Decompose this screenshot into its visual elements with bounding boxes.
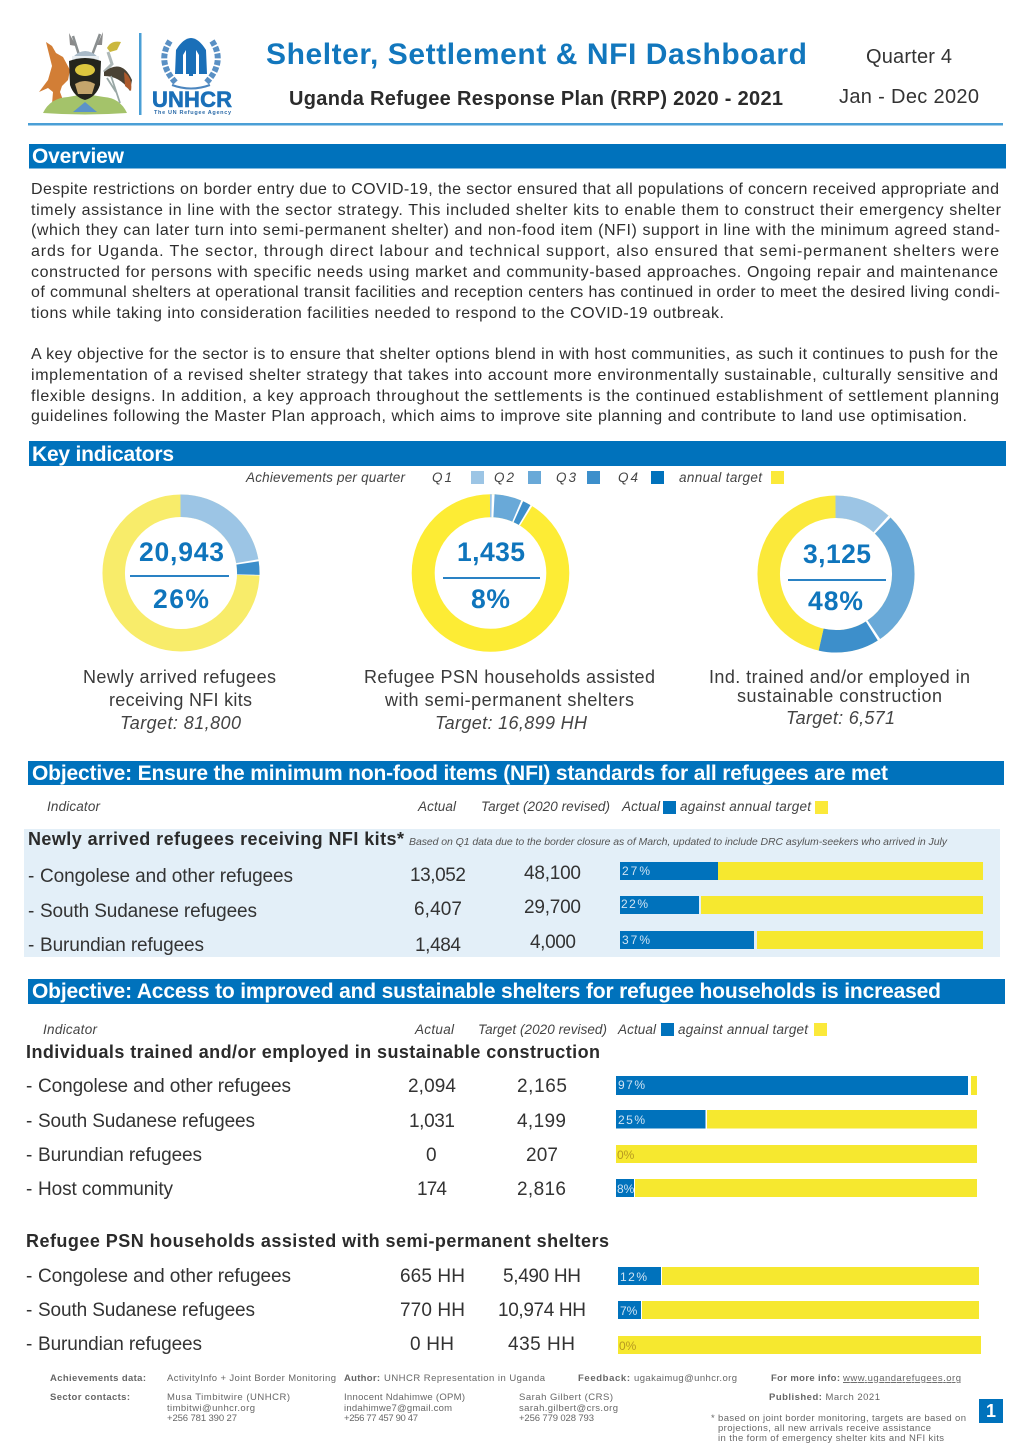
row: Congolese xyxy=(26,1266,979,1287)
legend: achievements per quarter: Q3 xyxy=(556,470,576,485)
row: South Sudanese: 6,407 xyxy=(414,899,462,920)
table header: Indicator xyxy=(47,799,100,814)
row: Burundian: - xyxy=(28,935,34,956)
footnote: * based on joint border monitoring, targets are based on xyxy=(711,1413,966,1424)
donut: individuals trained: sustainable construction xyxy=(737,686,942,706)
row: South Sudanese: 7% xyxy=(620,1304,638,1318)
row: Burundian: Burundian refugees xyxy=(40,935,204,956)
row: Burundian: 4,000 xyxy=(530,932,576,953)
credits row: ActivityInfo + Joint Border Monitoring xyxy=(167,1373,336,1384)
row: South Sudanese: 22% xyxy=(621,897,648,911)
header xyxy=(28,32,1003,126)
table header: Actual xyxy=(414,1022,455,1037)
row: Burundian xyxy=(26,1145,977,1166)
heading: objective 2: Objective: Access to improved and sustainable shelters for refugee households is increased xyxy=(32,980,941,1003)
quarter: Quarter 4 xyxy=(866,46,952,68)
panel: objective NFI standards xyxy=(24,761,1004,957)
table header xyxy=(47,799,828,814)
heading: key indicators xyxy=(29,441,1006,466)
text block: overview paragraph 2: implementation of a revised shelter strategy that takes into account more environmentally sustainable, culturally sensitive and xyxy=(31,367,998,384)
donut: newly arrived refugees: 20,943 xyxy=(139,537,224,567)
table header: Target (2020 revised) xyxy=(478,1022,607,1037)
footnote xyxy=(711,1413,966,1444)
text block: overview paragraph 2 xyxy=(31,346,999,425)
row: Congolese: Congolese and other refugees xyxy=(40,866,293,887)
text block: overview paragraph 1: of communal shelters at operational transit facilities and reception centers has continued in order to meet the desired living condi- xyxy=(31,284,1000,301)
donut: individuals trained: Ind. trained and/or employed in xyxy=(709,667,970,687)
subheading: PSN households: Refugee PSN households assisted with semi-permanent shelters xyxy=(26,1231,609,1251)
text block: overview paragraph 2: flexible designs. In addition, a key approach throughout the settlements is the continued establishment of settlement planning xyxy=(31,388,999,405)
text block: overview paragraph 2: A key objective for the sector is to ensure that shelter options blend in with host communities, as such it continues to push for the xyxy=(31,346,998,363)
legend: achievements per quarter xyxy=(245,470,784,485)
row: South Sudanese: - xyxy=(26,1111,32,1132)
row: Burundian: 435 HH xyxy=(508,1334,575,1355)
row: Congolese: 2,094 xyxy=(408,1076,456,1097)
panel: overview xyxy=(29,144,1006,425)
donut: individuals trained: 3,125 xyxy=(803,539,871,569)
row: South Sudanese xyxy=(28,896,983,922)
donut: refugee PSN households: 1,435 xyxy=(457,537,525,567)
sector contacts: +256 77 457 90 47 xyxy=(344,1413,418,1424)
icon: Uganda coat of arms xyxy=(39,32,132,114)
row: Congolese: Congolese and other refugees xyxy=(38,1076,291,1097)
text block: overview paragraph 1: (which they can later turn into semi-permanent shelter) and non-food item (NFI) support in line with the minimum agreed stand- xyxy=(31,222,1000,239)
donut: newly arrived refugees: Newly arrived refugees xyxy=(83,667,276,687)
row: Burundian: Burundian refugees xyxy=(38,1145,202,1166)
row: South Sudanese: South Sudanese refugees xyxy=(38,1111,255,1132)
text block: overview paragraph 2: guidelines following the Master Plan approach, which aims to improve site planning and contribute to land use optimisation. xyxy=(31,408,967,425)
row: Host community: 8% xyxy=(617,1182,635,1196)
published: Published: March 2021 xyxy=(769,1392,880,1403)
credits row xyxy=(50,1373,961,1384)
row: Congolese: 5,490 HH xyxy=(503,1266,581,1287)
row: South Sudanese: South Sudanese refugees xyxy=(40,901,257,922)
text block: overview paragraph 1 xyxy=(31,181,1002,322)
sector contacts: sarah.gilbert@crs.org xyxy=(519,1403,618,1414)
donut: refugee PSN households xyxy=(364,506,655,733)
donut: refugee PSN households: Target: 16,899 HH xyxy=(435,713,588,733)
sector contacts: +256 779 028 793 xyxy=(519,1413,594,1424)
footer xyxy=(50,1373,1003,1444)
text block: overview paragraph 1: Despite restrictions on border entry due to COVID-19, the sector ensured that all populations of concern received appropriate and xyxy=(31,181,999,198)
text block: overview paragraph 1: ards for Uganda. The sector, through direct labour and technical support, also ensured that semi-permanent shelters were xyxy=(31,243,999,260)
row: Host community: Host community xyxy=(38,1179,174,1200)
row: Burundian: 37% xyxy=(622,933,650,947)
row: Congolese: 2,165 xyxy=(517,1076,567,1097)
table header: Actual xyxy=(617,1022,657,1037)
row: South Sudanese: 25% xyxy=(618,1113,645,1127)
heading: overview xyxy=(29,144,1006,168)
credits row: ugakaimug@unhcr.org xyxy=(634,1373,737,1384)
row: Congolese xyxy=(28,862,983,887)
heading: objective 1: Objective: Ensure the minimum non-food items (NFI) standards for all refugees are met xyxy=(32,762,888,785)
row: Congolese: - xyxy=(26,1266,32,1287)
legend: achievements per quarter: Q1 xyxy=(432,470,452,485)
row: Congolese: 97% xyxy=(618,1078,645,1092)
donut: refugee PSN households: with semi-permanent shelters xyxy=(384,690,634,710)
table header: Actual xyxy=(621,799,661,814)
row: Congolese: - xyxy=(26,1076,32,1097)
row: Congolese: 12% xyxy=(620,1270,647,1284)
table band xyxy=(24,829,1000,957)
row: Burundian: 0% xyxy=(617,1148,635,1162)
sector contacts: indahimwe7@gmail.com xyxy=(344,1403,452,1414)
text block: overview paragraph 1: tions while taking into consideration facilities needed to respond to the COVID-19 outbreak. xyxy=(31,305,724,322)
legend: achievements per quarter: annual target xyxy=(679,470,763,485)
row: Burundian: 1,484 xyxy=(415,935,461,956)
row: Congolese: 48,100 xyxy=(524,863,581,884)
row: Burundian: 0% xyxy=(619,1339,637,1353)
row: South Sudanese: - xyxy=(26,1300,32,1321)
row: South Sudanese: 4,199 xyxy=(517,1111,566,1132)
row: South Sudanese: 1,031 xyxy=(409,1111,455,1132)
icon: UNHCR logo: UNHCR xyxy=(152,87,232,112)
table header: Indicator xyxy=(43,1022,98,1037)
donut: individuals trained: 48% xyxy=(808,586,863,616)
credits row: Feedback: xyxy=(578,1373,630,1384)
sector contacts: Musa Timbitwire (UNHCR) xyxy=(167,1392,290,1403)
legend: achievements per quarter: Achievements per quarter xyxy=(245,470,406,485)
row: South Sudanese xyxy=(26,1300,979,1321)
row: South Sudanese xyxy=(26,1110,977,1132)
row: Congolese: 13,052 xyxy=(410,865,466,886)
icon: UNHCR logo xyxy=(152,38,232,116)
legend: achievements per quarter: Q4 xyxy=(618,470,638,485)
donut: newly arrived refugees: receiving NFI kits xyxy=(109,690,252,710)
sector contacts: timbitwi@unhcr.org xyxy=(167,1403,255,1414)
legend: achievements per quarter: Q2 xyxy=(494,470,514,485)
donut: refugee PSN households: Refugee PSN households assisted xyxy=(364,667,655,687)
row: Burundian: 0 xyxy=(426,1145,437,1166)
heading: key indicators: Key indicators xyxy=(32,443,174,466)
table header: against annual target xyxy=(678,1022,809,1037)
row: Burundian xyxy=(26,1334,981,1355)
credits row: www.ugandarefugees.org xyxy=(842,1373,961,1384)
sector contacts: Sarah Gilbert (CRS) xyxy=(519,1392,613,1403)
row: Host community xyxy=(26,1179,977,1200)
table header xyxy=(43,1022,827,1037)
page number: 1 xyxy=(986,1401,996,1421)
sector contacts: +256 781 390 27 xyxy=(167,1413,237,1424)
row: Host community: 2,816 xyxy=(517,1179,566,1200)
row: Burundian xyxy=(28,931,983,956)
table header: against annual target xyxy=(680,799,812,814)
donut: individuals trained: Target: 6,571 xyxy=(786,708,895,728)
row: South Sudanese: 10,974 HH xyxy=(498,1300,586,1321)
donut: refugee PSN households: 8% xyxy=(471,584,510,614)
page number xyxy=(979,1399,1003,1423)
row: South Sudanese: South Sudanese refugees xyxy=(38,1300,255,1321)
footnote: in the form of emergency shelter kits and NFI kits xyxy=(718,1433,944,1444)
heading: overview: Overview xyxy=(32,145,125,168)
icon: UNHCR logo: The UN Refugee Agency xyxy=(154,110,232,116)
row: Burundian: Burundian refugees xyxy=(38,1334,202,1355)
credits row: Achievements data: xyxy=(50,1373,146,1384)
donut: newly arrived refugees: Target: 81,800 xyxy=(120,713,241,733)
sector contacts xyxy=(50,1392,618,1424)
donut: newly arrived refugees: 26% xyxy=(153,584,209,614)
row: Burundian: 0 HH xyxy=(410,1334,454,1355)
row: Congolese: 665 HH xyxy=(400,1266,465,1287)
table header: Actual xyxy=(417,799,457,814)
period: Jan - Dec 2020 xyxy=(839,86,979,108)
row: Congolese: 27% xyxy=(622,864,650,878)
subheading: individuals trained: Individuals trained and/or employed in sustainable construction xyxy=(26,1042,600,1062)
panel: key indicators xyxy=(29,441,1006,733)
sector contacts: Sector contacts: xyxy=(50,1392,130,1403)
row: Burundian: - xyxy=(26,1334,32,1355)
subheading: NFI kits: Newly arrived refugees receiving NFI kits* xyxy=(28,829,404,849)
table header: Target (2020 revised) xyxy=(481,799,610,814)
credits row: Author: xyxy=(344,1373,380,1384)
row: Burundian: - xyxy=(26,1145,32,1166)
text block: overview paragraph 1: constructed for persons with specific needs using market and community-based approaches. Ongoing repair and maintenance xyxy=(31,264,998,281)
divider xyxy=(139,33,142,115)
text block: overview paragraph 1: timely assistance in line with the sector strategy. This included shelter kits to enable them to construct their emergency shelter xyxy=(31,202,1002,219)
row: Burundian: 207 xyxy=(526,1145,558,1166)
subtitle: Uganda Refugee Response Plan (RRP) 2020 - 2021 xyxy=(289,88,783,110)
sector contacts: Innocent Ndahimwe (OPM) xyxy=(344,1392,465,1403)
credits row: For more info: xyxy=(771,1373,840,1384)
row: Host community: - xyxy=(26,1179,32,1200)
title: Shelter, Settlement & NFI Dashboard xyxy=(266,38,807,71)
row: South Sudanese: 29,700 xyxy=(524,897,581,918)
row: Congolese: Congolese and other refugees xyxy=(38,1266,291,1287)
credits row: UNHCR Representation in Uganda xyxy=(384,1373,546,1384)
row: Congolese: - xyxy=(28,866,34,887)
panel: objective shelters xyxy=(26,979,1005,1355)
footnote: projections, all new arrivals receive assistance xyxy=(718,1423,931,1434)
note: Based on Q1 data due to the border closure as of March, updated to include DRC asylum-seekers who arrived in July xyxy=(409,836,948,848)
row: South Sudanese: 770 HH xyxy=(400,1300,465,1321)
row: Host community: 174 xyxy=(417,1179,447,1200)
donut: individuals trained xyxy=(709,507,970,728)
row: South Sudanese: - xyxy=(28,901,34,922)
donut: newly arrived refugees xyxy=(83,506,276,733)
row: Congolese xyxy=(26,1076,977,1097)
